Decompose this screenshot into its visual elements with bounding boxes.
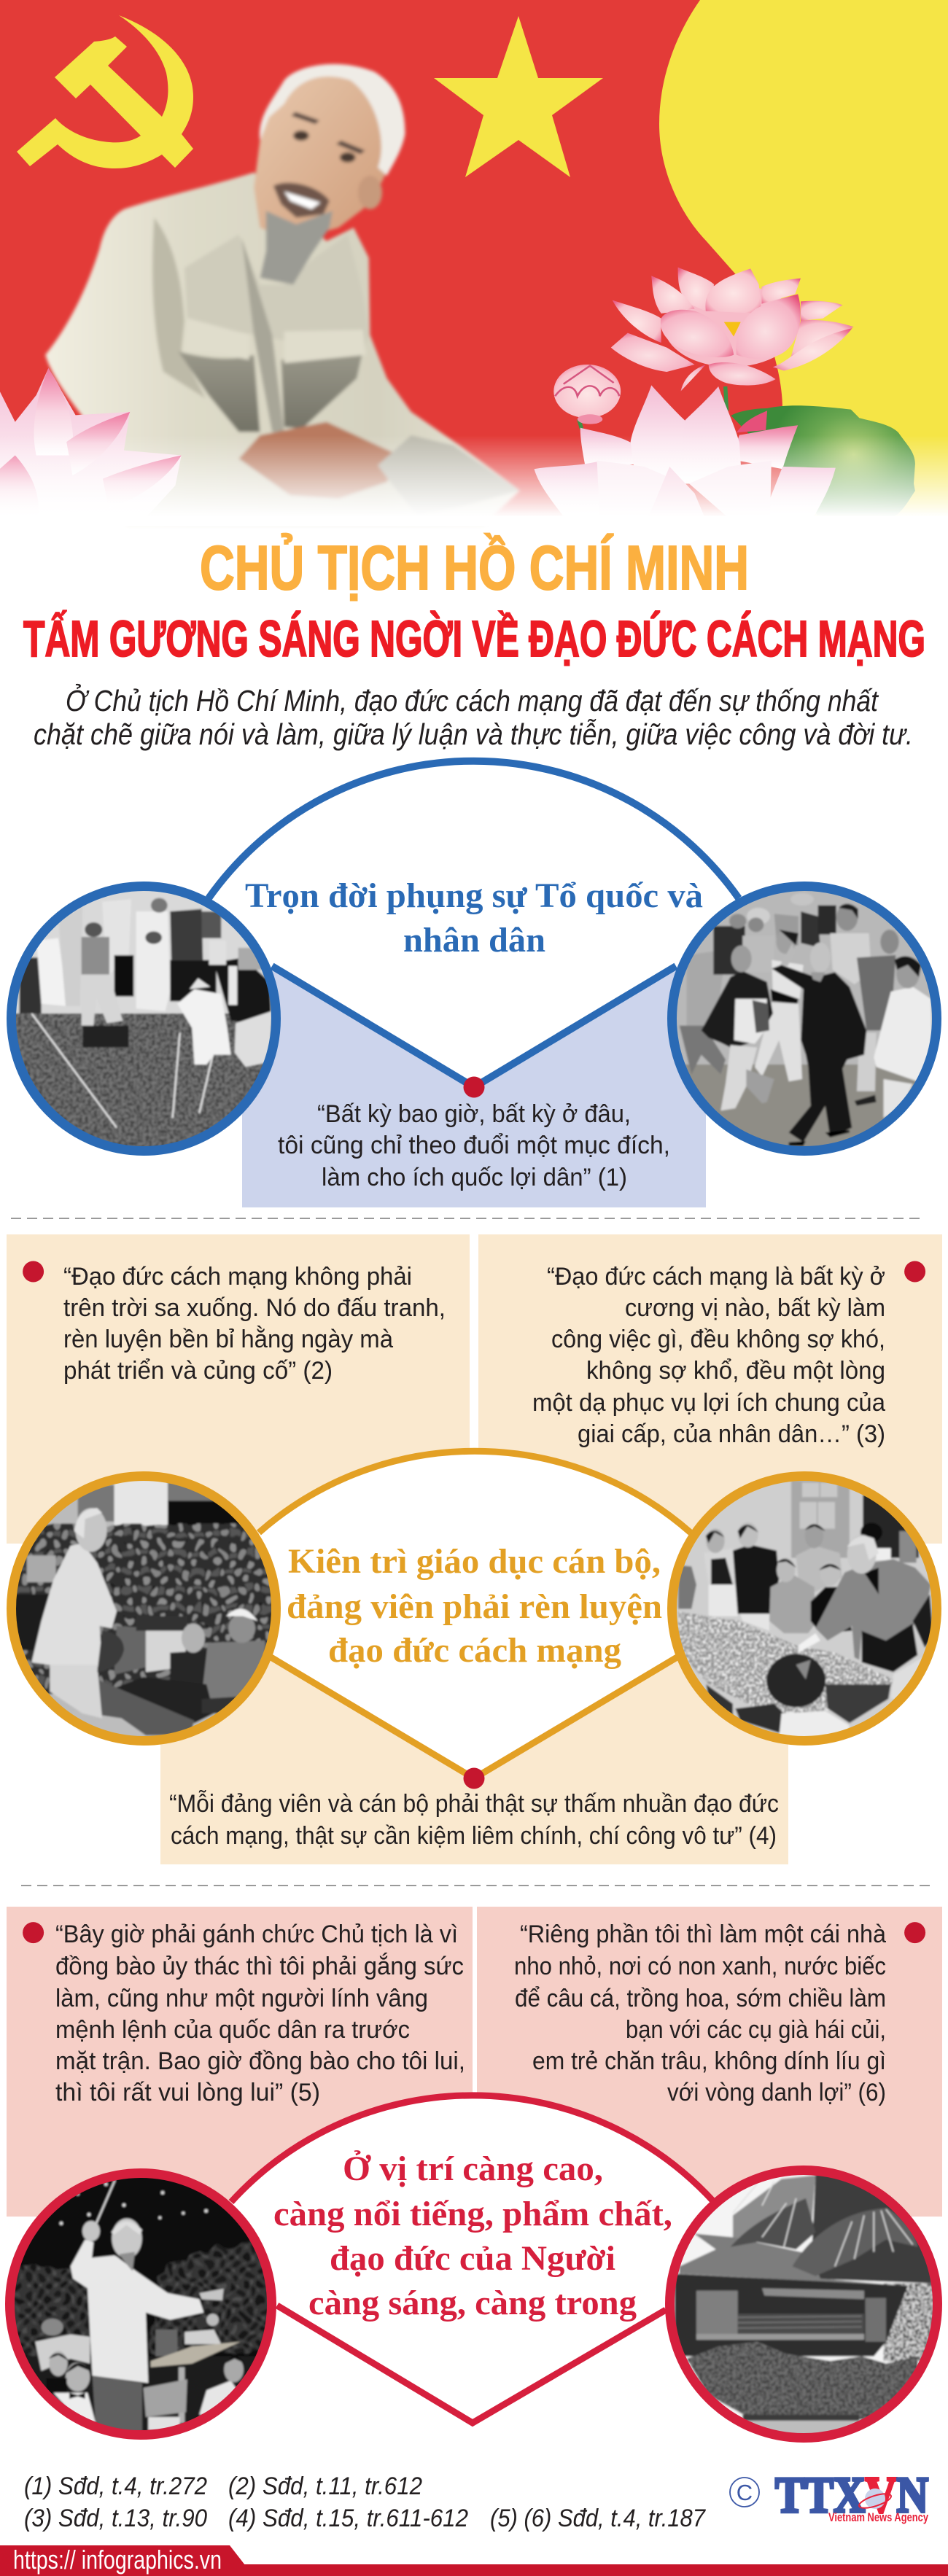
portrait of President Ho Chi Minh: [45, 64, 520, 525]
photo 6 ring: [669, 2170, 938, 2438]
blue fan shape: [209, 761, 739, 1087]
heading: section 3: [273, 2149, 672, 2322]
quote 1: [278, 1100, 670, 1191]
quote 3: một dạ phục vụ lợi ích chung của: [532, 1389, 885, 1417]
heading: section 3: càng nổi tiếng, phẩm chất,: [273, 2195, 672, 2233]
quote 6: em trẻ chăn trâu, không dính líu gì: [532, 2047, 886, 2075]
quote 2: rèn luyện bền bỉ hằng ngày mà: [63, 1326, 393, 1353]
lavender quote background: [242, 948, 706, 1207]
copyright symbol: [730, 2478, 759, 2507]
quote 1: “Bất kỳ bao giờ, bất kỳ ở đâu,: [317, 1100, 631, 1128]
panel: section 3 red: [0, 1907, 948, 2454]
footnotes: (3) Sđd, t.13, tr.90: [24, 2505, 207, 2532]
large lotus flower: [611, 268, 854, 392]
quote 5: [23, 1921, 465, 2106]
lotus bud: [553, 365, 621, 424]
red fan shape: [231, 2096, 714, 2423]
quote 3: giai cấp, của nhân dân…” (3): [578, 1420, 885, 1448]
quote 6: [514, 1921, 925, 2106]
Ho Chi Minh figure: [31, 1544, 117, 1668]
icon: yellow star: [434, 16, 603, 177]
quote 5: làm, cũng như một người lính vâng: [55, 1985, 428, 2012]
cream quote panels: [7, 1234, 942, 1864]
lower shirt shadow: [179, 351, 362, 432]
intro paragraph: [34, 683, 913, 751]
mid man with white trousers: [772, 960, 804, 999]
lotus flowers and leaf right: [535, 268, 915, 520]
quote 6: “Riêng phần tôi thì làm một cái nhà: [520, 1921, 886, 1948]
photo 5 ring: [10, 2173, 271, 2435]
hero yellow flag swoosh: [659, 0, 948, 525]
quote 5: mệnh lệnh của quốc dân ra trước: [55, 2016, 410, 2044]
ground: [16, 1012, 271, 1146]
right musicians and stands: [155, 2330, 177, 2357]
face: [254, 71, 393, 241]
palm upper dark: [811, 2174, 932, 2284]
quote 2: phát triển và củng cố” (2): [63, 1357, 333, 1385]
white-jacket man: [874, 987, 932, 1081]
hands: [238, 422, 399, 499]
front men: [114, 1626, 151, 1675]
quote 4: cách mạng, thật sự cần kiệm liêm chính, chí công vô tư” (4): [171, 1822, 777, 1850]
photo 2: Ho Chi Minh walking with crowd: [677, 891, 932, 1146]
quote 5 bullet: [23, 1922, 44, 1943]
heading: section 2: đảng viên phải rèn luyện: [287, 1587, 662, 1626]
heading: section 3: Ở vị trí càng cao,: [343, 2149, 603, 2188]
panel: section 2 orange: [0, 1234, 948, 1864]
foreground: [706, 1684, 733, 1719]
photo 3: speaking to the crowd: [16, 1481, 271, 1736]
footnotes: (4) Sđd, t.15, tr.611-612: [228, 2505, 468, 2532]
photo 3 ring: [12, 1476, 276, 1741]
Ho Chi Minh conducting: [71, 2240, 203, 2383]
wordmark: TTXVN: [775, 2467, 928, 2524]
footer strip: [0, 2564, 948, 2576]
heading: section 1: [245, 876, 703, 960]
jacket chest shading: [184, 234, 369, 355]
lotus leaf: [731, 405, 915, 520]
red dot: [464, 1076, 484, 1098]
quote 2: [23, 1261, 446, 1385]
quote 6: với vòng danh lợi” (6): [667, 2079, 886, 2106]
baton: [96, 2180, 115, 2224]
lower white lotus flower: [535, 385, 836, 520]
bushes: [687, 2342, 917, 2419]
heading: section 1: nhân dân: [403, 921, 545, 960]
roof: [680, 2233, 903, 2286]
paper: [378, 435, 520, 515]
heading: section 2: Kiên trì giáo dục cán bộ,: [288, 1542, 661, 1581]
photo 5: conducting the orchestra: [15, 2178, 267, 2430]
quote 2: “Đạo đức cách mạng không phải: [63, 1263, 412, 1291]
heading: section 3: đạo đức của Người: [330, 2239, 615, 2278]
heading: section 2: [287, 1542, 662, 1670]
url text: https:// infographics.vn: [13, 2545, 222, 2575]
heading: section 1: Trọn đời phụng sự Tổ quốc và: [245, 876, 703, 915]
quote 3: công việc gì, đều không sợ khó,: [551, 1326, 885, 1353]
hero red background: [0, 0, 948, 525]
pink quote panels: [7, 1907, 942, 2217]
quote 4: “Mỗi đảng viên và cán bộ phải thật sự thấm nhuần đạo đức: [169, 1790, 779, 1818]
quote 3: [532, 1261, 925, 1448]
footer bar: [0, 2545, 948, 2576]
footnotes: (2) Sđd, t.11, tr.612: [228, 2472, 422, 2500]
footer tab: [0, 2545, 245, 2565]
right foliage: [884, 2284, 937, 2361]
logo: TTXVN Vietnam News Agency: [730, 2467, 928, 2524]
globe: [865, 2489, 885, 2509]
jacket folds: [152, 217, 206, 398]
photo 1: group on hillside: [16, 891, 271, 1146]
map: [678, 1611, 893, 1719]
hero fade to white: [0, 435, 948, 517]
quote 5: thì tôi rất vui lòng lui” (5): [55, 2079, 320, 2106]
quote 6: bạn với các cụ già hái củi,: [626, 2016, 886, 2044]
title line 1: CHỦ TỊCH HỒ CHÍ MINH: [200, 533, 749, 603]
quote 6: để câu cá, trồng hoa, sớm chiều làm: [515, 1985, 886, 2012]
jacket: [45, 172, 520, 525]
quote 3: không sợ khổ, đều một lòng: [586, 1357, 885, 1385]
quote 1: tôi cũng chỉ theo đuổi một mục đích,: [278, 1132, 670, 1159]
quote 5: mặt trận. Bao giờ đồng bào cho tôi lui,: [55, 2047, 465, 2075]
quote 4: [169, 1790, 779, 1850]
eyes and brows: [293, 114, 362, 152]
ear: [358, 176, 382, 209]
Ho Chi Minh center: [772, 965, 866, 1070]
quote 3: “Đạo đức cách mạng là bất kỳ ở: [547, 1263, 885, 1291]
stars: [60, 2182, 208, 2225]
hair: [260, 64, 405, 176]
photo 2 ring: [672, 887, 936, 1151]
quote 2 bullet: [23, 1261, 44, 1282]
panel: section 1 blue: [0, 761, 948, 1207]
orange fan shape: [259, 1451, 691, 1778]
icon: hammer and sickle: [17, 15, 193, 168]
moustache and mouth: [273, 183, 330, 217]
quote 6 bullet: [904, 1922, 925, 1943]
pocket flaps: [184, 318, 366, 363]
Ho Chi Minh: [815, 1559, 931, 1660]
photo 4: group around the map: [677, 1481, 932, 1736]
palm front: [793, 2208, 917, 2276]
quote 1: làm cho ích quốc lợi dân” (1): [322, 1164, 627, 1191]
photo 1 ring: [12, 887, 276, 1151]
heading: section 3: càng sáng, càng trong: [308, 2284, 637, 2322]
heading: section 2: đạo đức cách mạng: [328, 1631, 621, 1670]
left musicians: [35, 2335, 90, 2371]
quote 2: trên trời sa xuống. Nó do đấu tranh,: [63, 1294, 446, 1322]
left man dark jacket: [702, 971, 773, 1048]
quote 5: “Bây giờ phải gánh chức Chủ tịch là vì: [55, 1921, 458, 1948]
photo 6: stilt house: [660, 2162, 948, 2454]
quote 6: nho nhỏ, nơi có non xanh, nước biếc: [514, 1953, 886, 1980]
footnotes: (1) Sđd, t.4, tr.272: [24, 2472, 207, 2500]
wall: [675, 2273, 908, 2357]
left lotus: [0, 368, 182, 525]
stems: [579, 386, 727, 429]
photo 4 ring: [672, 1476, 936, 1741]
quote 3: cương vị nào, bất kỳ làm: [625, 1294, 885, 1322]
quote 5: đồng bào ủy thác thì tôi phải gắng sức: [55, 1953, 464, 1980]
beard: [260, 211, 333, 284]
red dot: [464, 1767, 484, 1789]
footnotes: [24, 2472, 706, 2532]
copyright symbol: C: [737, 2480, 753, 2505]
left people: [678, 1565, 696, 1609]
panel: hero banner: [0, 0, 948, 526]
quote 3 bullet: [904, 1261, 925, 1282]
footnotes: (5) (6) Sđd, t.4, tr.187: [490, 2505, 706, 2532]
